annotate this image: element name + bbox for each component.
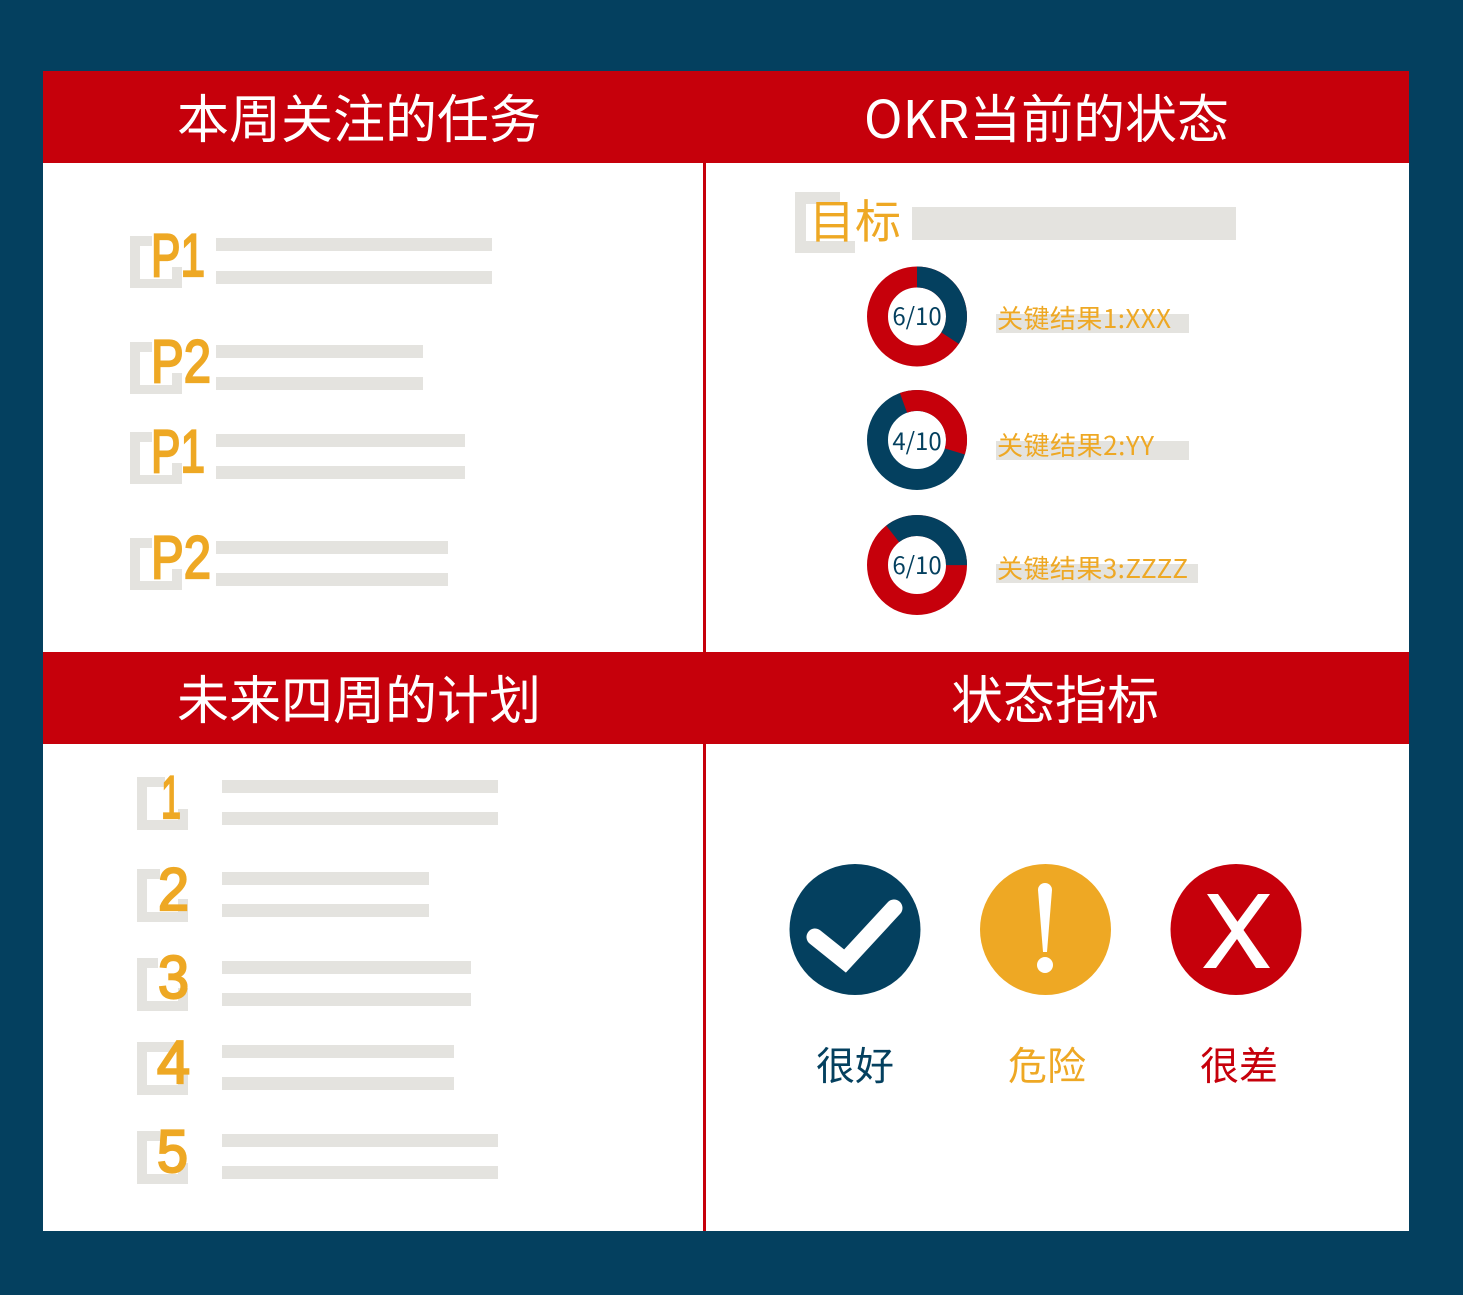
label: very bad: 很差 bbox=[1200, 1036, 1278, 1092]
label: at risk: 危险 bbox=[1008, 1036, 1086, 1092]
task row 4 bbox=[130, 524, 448, 591]
objective: 目标 bbox=[809, 186, 901, 252]
task row 2: P2 bbox=[151, 328, 211, 395]
task row 4: P2 bbox=[151, 524, 211, 591]
key result 3: 关键结果3:ZZZZ bbox=[997, 549, 1188, 586]
task row 1: P1 bbox=[151, 222, 205, 289]
header: status indicators bbox=[703, 652, 1409, 744]
key result 1: 6/10 bbox=[892, 297, 942, 332]
plan row 4 bbox=[137, 1029, 454, 1096]
panel: OKR status bbox=[703, 71, 1409, 620]
icon: cross, bad bbox=[1170, 864, 1302, 995]
header: OKR status bbox=[703, 71, 1409, 163]
key result 1 bbox=[878, 277, 1189, 356]
plan row 1 bbox=[137, 764, 498, 831]
header: OKR status: OKR当前的状态 bbox=[864, 78, 1229, 153]
header: tasks this week bbox=[43, 71, 703, 163]
task row 1 bbox=[130, 222, 492, 289]
header: tasks this week: 本周关注的任务 bbox=[177, 78, 541, 153]
key result 2: 4/10 bbox=[892, 422, 942, 457]
plan row 4: 4 bbox=[157, 1029, 190, 1096]
task row 3 bbox=[130, 418, 465, 485]
icon: check, good bbox=[790, 864, 920, 995]
key result 2: 关键结果2:YY bbox=[997, 426, 1154, 463]
task row 2 bbox=[130, 328, 423, 395]
key result 1: 关键结果1:XXX bbox=[997, 299, 1171, 336]
plan row 3: 3 bbox=[158, 944, 189, 1011]
objective bbox=[795, 186, 1236, 253]
key result 3 bbox=[862, 510, 1198, 620]
icon: exclamation, at risk bbox=[980, 864, 1111, 995]
header: status indicators: 状态指标 bbox=[951, 659, 1159, 734]
plan row 2 bbox=[137, 856, 429, 923]
header: next four weeks: 未来四周的计划 bbox=[177, 659, 541, 734]
header: next four weeks bbox=[43, 652, 703, 744]
plan row 5 bbox=[137, 1118, 498, 1185]
plan row 1: 1 bbox=[161, 764, 181, 831]
panel: status indicators bbox=[703, 652, 1409, 1092]
task row 3: P1 bbox=[151, 418, 205, 485]
key result 2 bbox=[866, 389, 1189, 491]
plan row 2: 2 bbox=[158, 856, 189, 923]
plan row 3 bbox=[137, 944, 471, 1011]
label: very good: 很好 bbox=[816, 1036, 894, 1092]
panel: next four weeks bbox=[43, 652, 703, 1185]
plan row 5: 5 bbox=[157, 1118, 188, 1185]
key result 3: 6/10 bbox=[892, 546, 942, 581]
panel: tasks this week bbox=[43, 71, 703, 591]
